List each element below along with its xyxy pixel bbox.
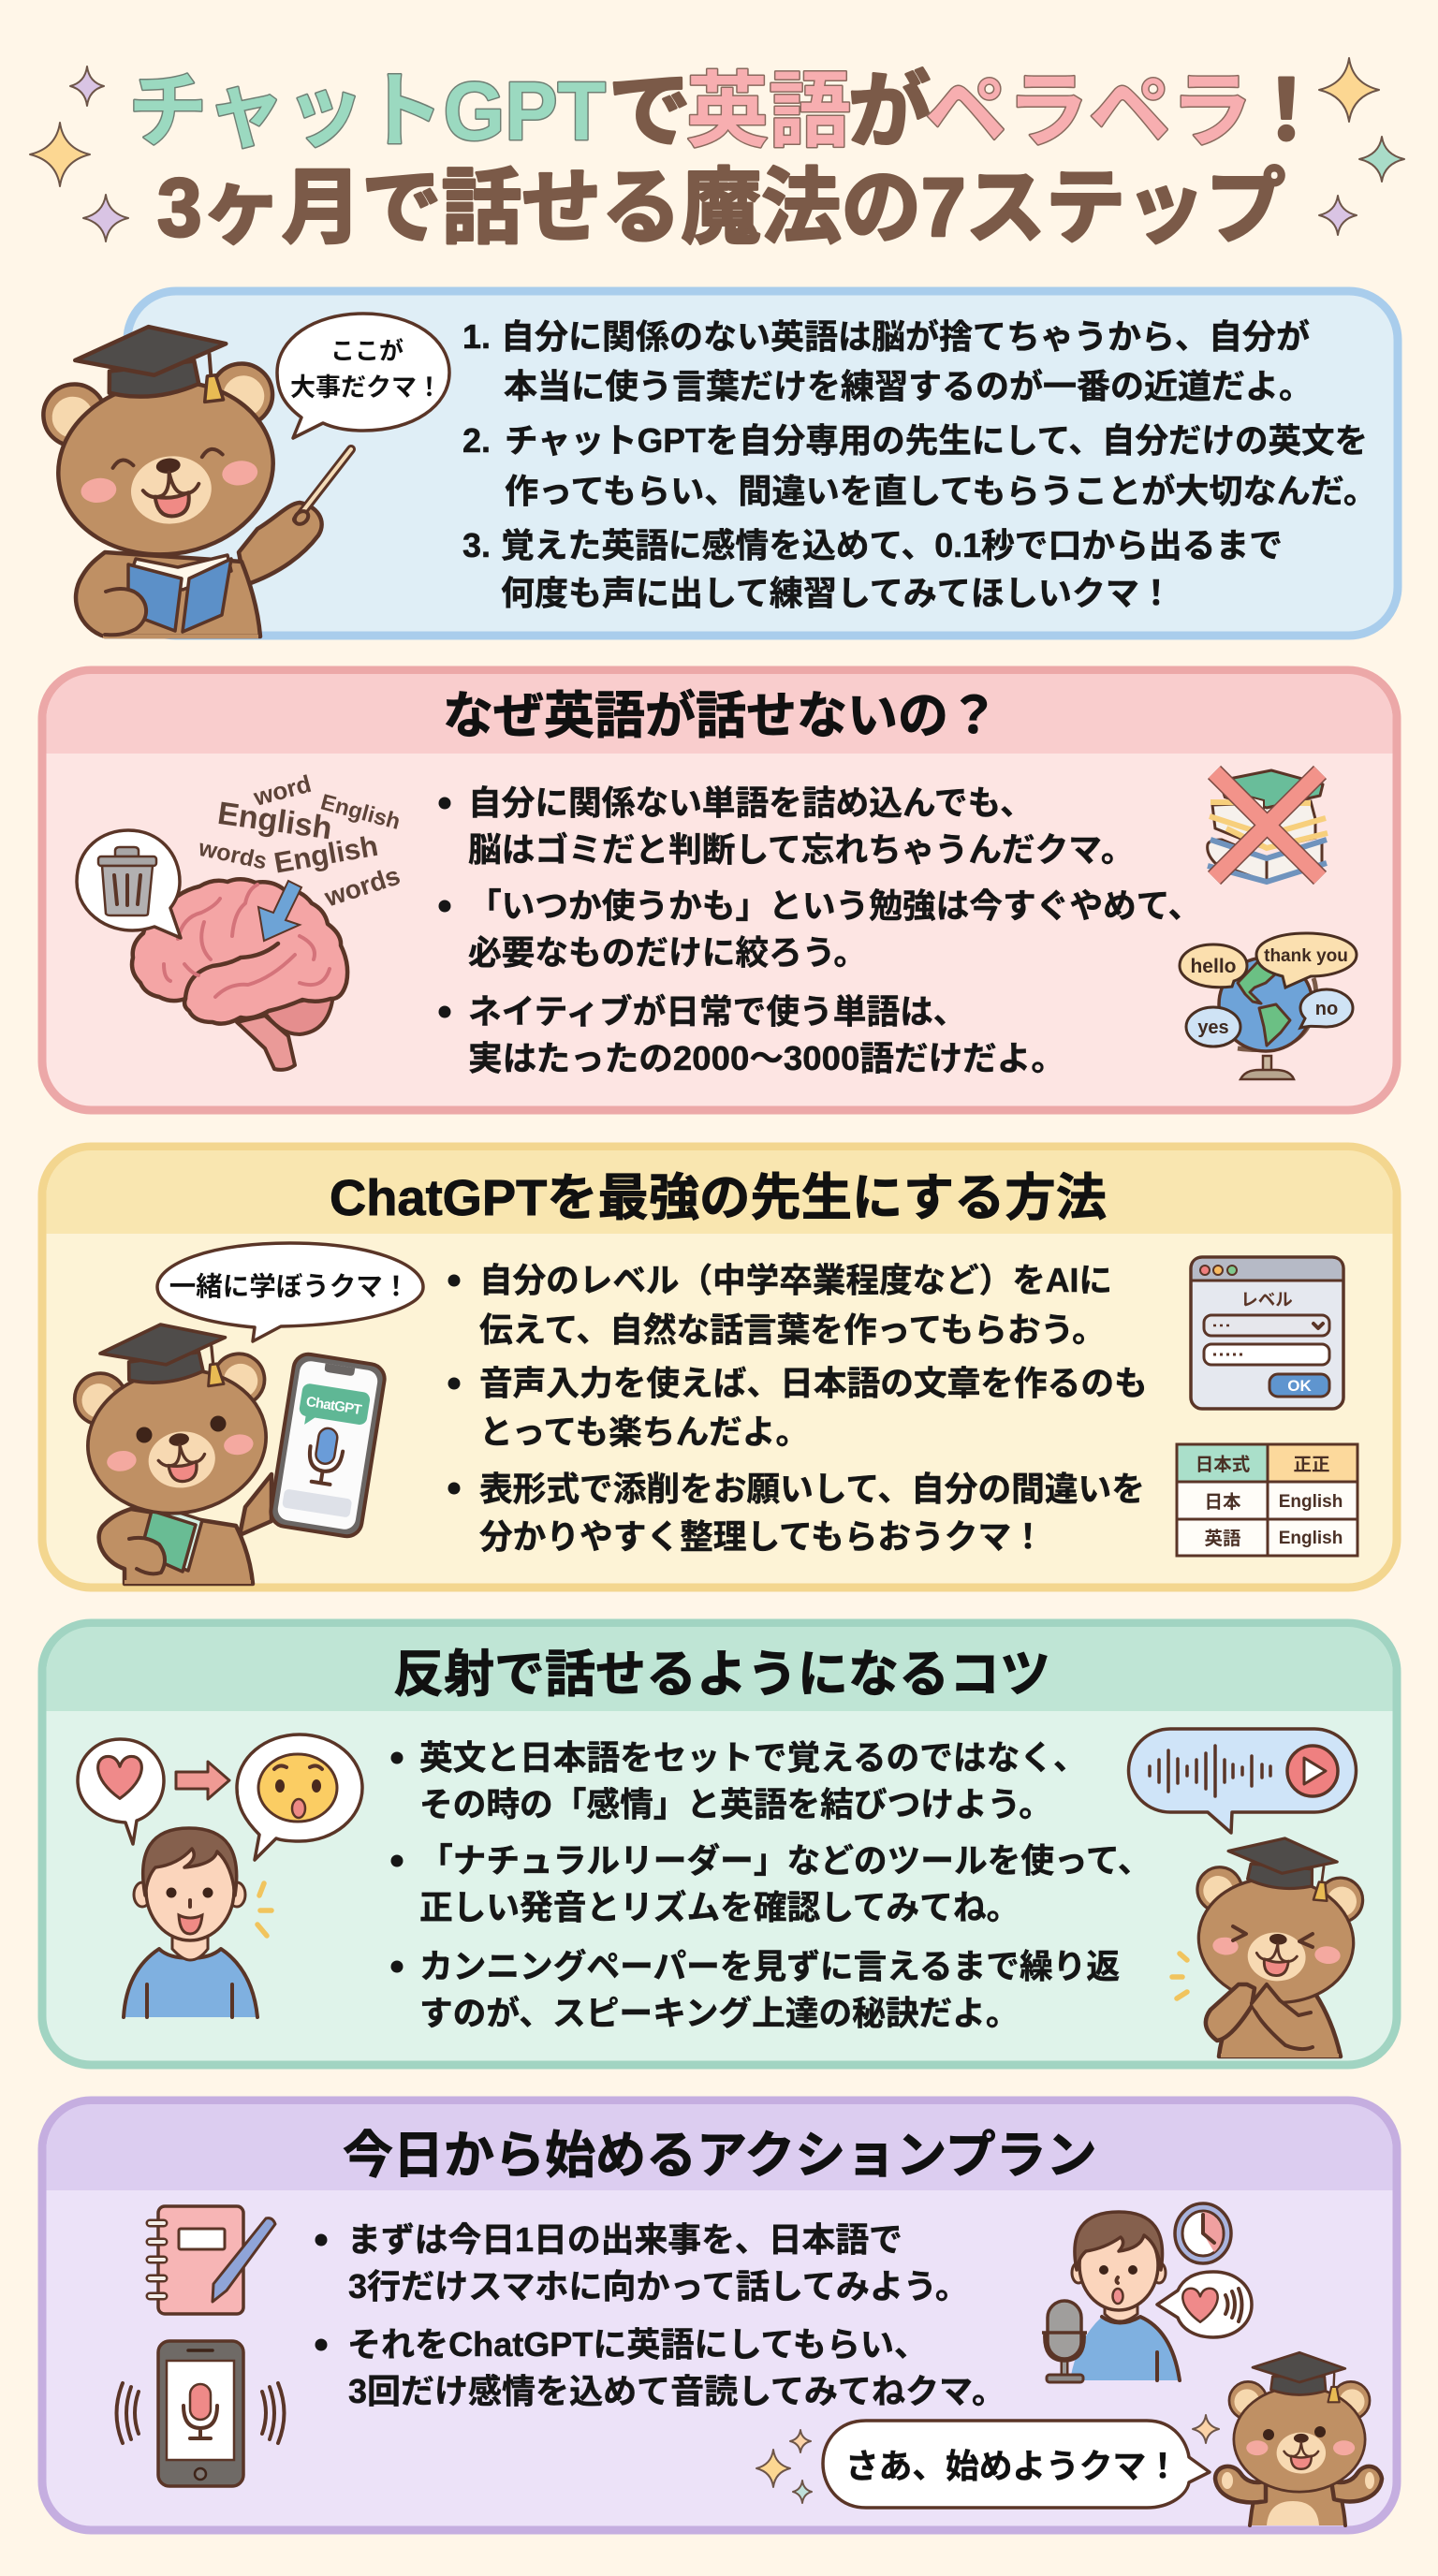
icon: globe with greetings: thank you [1264, 946, 1348, 966]
numbered list: チャットGPTを自分専用の先生にして、自分だけの英文を [505, 421, 1368, 460]
icon: notebook and pen [150, 2206, 275, 2314]
floating english words: English [318, 789, 403, 835]
illustration: brain [132, 879, 347, 1070]
floating english words: words [320, 860, 404, 913]
heading: 反射で話せるようになるコツ [393, 1647, 1050, 1703]
icon: level dialog window: OK [1287, 1377, 1312, 1395]
heading: ChatGPTを最強の先生にする方法 [330, 1170, 1107, 1226]
bullet list: その時の「感情」と英語を結びつけよう。 [419, 1786, 1052, 1823]
sparkles around bubble [756, 2415, 1219, 2503]
bullet list: 3回だけ感情を込めて音読してみてねクマ。 [348, 2373, 1005, 2410]
bullet list: 分かりやすく整理してもらおうクマ！ [479, 1518, 1045, 1556]
heading: なぜ英語が話せないの？ [443, 688, 999, 744]
panel: summary [34, 291, 1398, 637]
title: 3ヶ月で話せる魔法の7ステップ [157, 161, 1285, 254]
table: correction: 日本 [1204, 1492, 1241, 1513]
icon: crossed-out book stack [1208, 770, 1328, 882]
speech bubble: study together: 一緒に学ぼうクマ！ [169, 1272, 409, 1302]
bullet list: 正しい発音とリズムを確認してみてね。 [419, 1889, 1020, 1926]
floating english words [196, 769, 404, 913]
panel: why you can't speak [42, 670, 1397, 1110]
speech bubble: let's start: さあ、始めようクマ！ [845, 2448, 1180, 2485]
bullet list: 英文と日本語をセットで覚えるのではなく、 [419, 1739, 1087, 1777]
bullet list: 実はたったの2000〜3000語だけだよ。 [468, 1040, 1065, 1077]
table: correction: 日本式 [1196, 1455, 1251, 1475]
bullet list: 伝えて、自然な話言葉を作ってもらおう。 [479, 1311, 1106, 1349]
floating english words: word [250, 769, 315, 812]
person speaking [124, 1828, 271, 2017]
numbered list: 作ってもらい、間違いを直してもらうことが大切なんだ。 [505, 472, 1377, 510]
bullet list: 音声入力を使えば、日本語の文章を作るのも [479, 1365, 1148, 1402]
title: ！ [1245, 65, 1328, 157]
bear with phone [66, 1311, 387, 1584]
panel: reflex speaking [42, 1623, 1397, 2065]
numbered list: 3. [462, 526, 491, 564]
table: correction: 英語 [1204, 1529, 1241, 1549]
speech bubble: important: 大事だクマ！ [290, 373, 442, 402]
bullet list [315, 2221, 1005, 2410]
numbered list: 2. [462, 421, 491, 460]
bullet list: それをChatGPTに英語にしてもらい、 [347, 2326, 928, 2364]
illustration: emotion to speech [78, 1734, 362, 1860]
title [128, 65, 1328, 254]
bullet list: 自分に関係ない単語を詰め込んでも、 [468, 784, 1034, 822]
person with microphone [1042, 2212, 1180, 2382]
panel: chatgpt teacher [42, 1147, 1397, 1588]
icon: trash bubble [77, 830, 181, 938]
bullet list [391, 1739, 1152, 2032]
speech bubble: important: ここが [330, 337, 404, 365]
icon: phone with microphone [116, 2341, 285, 2486]
bullet list: 「ナチュラルリーダー」などのツールを使って、 [419, 1842, 1152, 1880]
panel: action plan [42, 2100, 1397, 2530]
speech bubble: let's start [823, 2421, 1210, 2508]
floating english words: English [215, 796, 334, 846]
numbered list: 1. [462, 317, 491, 356]
bullet list [448, 1262, 1148, 1556]
icon: level dialog window [1191, 1257, 1343, 1409]
icon: level dialog window: レベル [1240, 1290, 1293, 1310]
bullet list [438, 784, 1201, 1077]
icon: globe with greetings: yes [1197, 1017, 1229, 1038]
bullet list: 脳はゴミだと判断して忘れちゃうんだクマ。 [468, 831, 1135, 869]
bullet list: すのが、スピーキング上達の秘訣だよ。 [419, 1995, 1020, 2032]
bullet list: 「いつか使うかも」という勉強は今すぐやめて、 [468, 887, 1201, 925]
title: が [848, 65, 931, 157]
heading: 今日から始めるアクションプラン [343, 2128, 1097, 2184]
floating english words: words [196, 835, 270, 875]
bullet list: とっても楽ちんだよ。 [479, 1413, 809, 1451]
title: ペラペラ [925, 65, 1253, 157]
title: で [609, 65, 691, 157]
table: correction [1177, 1444, 1357, 1556]
speech bubble: heart voice [1157, 2272, 1252, 2337]
bear with phone: ChatGPT [305, 1394, 363, 1418]
numbered list: 本当に使う言葉だけを練習するのが一番の近道だよ。 [504, 367, 1313, 405]
bullet list: まずは今日1日の出来事を、日本語で [347, 2221, 902, 2259]
table: correction: 正正 [1293, 1455, 1330, 1475]
numbered list: 何度も声に出して練習してみてほしいクマ！ [501, 574, 1173, 612]
icon: globe with greetings [1180, 933, 1357, 1079]
speech bubble: study together [157, 1243, 423, 1341]
cheering bear [1172, 1831, 1368, 2056]
numbered list: 覚えた英語に感情を込めて、0.1秒で口から出るまで [501, 526, 1283, 564]
bullet list: 自分のレベル（中学卒業程度など）をAIに [479, 1262, 1112, 1299]
bear with book and pointer [34, 313, 351, 637]
numbered list: 自分に関係のない英語は脳が捨てちゃうから、自分が [501, 317, 1310, 356]
icon: clock [1175, 2203, 1231, 2263]
title: チャットGPT [128, 65, 606, 157]
table: correction: English [1279, 1492, 1343, 1512]
decorative sparkles around title [30, 58, 1404, 242]
bullet list: 必要なものだけに絞ろう。 [468, 934, 867, 972]
waving bear [1215, 2352, 1382, 2525]
icon: globe with greetings: no [1315, 999, 1338, 1019]
title: 英語 [686, 65, 851, 157]
bullet list: カンニングペーパーを見ずに言えるまで繰り返 [419, 1948, 1120, 1985]
bullet list: 3行だけスマホに向かって話してみよう。 [348, 2268, 969, 2305]
table: correction: English [1279, 1529, 1343, 1548]
speech bubble: important [277, 314, 449, 438]
bullet list: 表形式で添削をお願いして、自分の間違いを [479, 1471, 1145, 1508]
numbered list [462, 317, 1377, 612]
audio player bubble [1129, 1729, 1356, 1833]
icon: globe with greetings: hello [1190, 956, 1237, 977]
bullet list: ネイティブが日常で使う単語は、 [468, 993, 966, 1031]
floating english words: English [271, 829, 380, 880]
